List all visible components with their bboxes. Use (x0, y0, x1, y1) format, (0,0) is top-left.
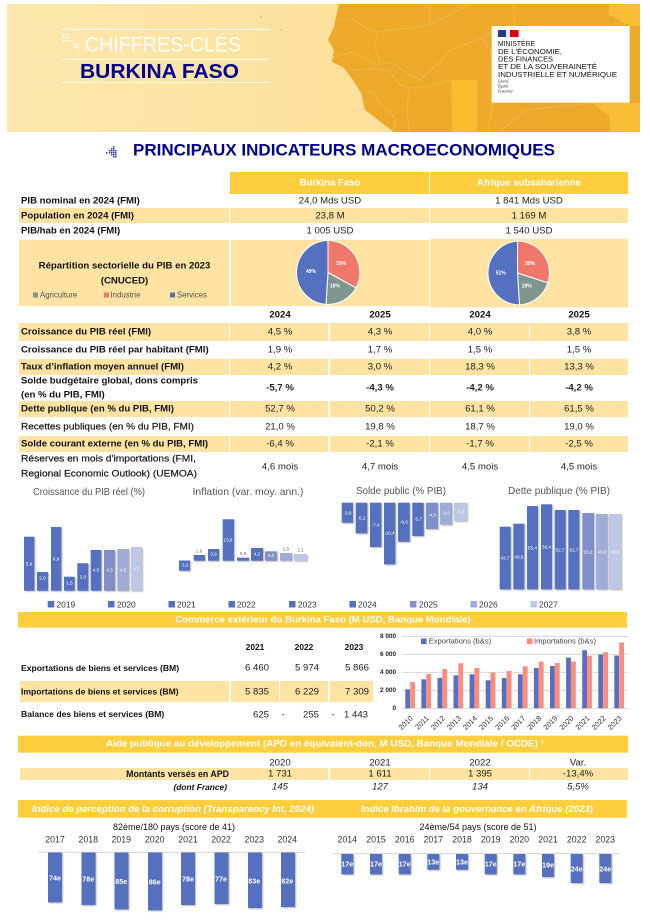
table: commerce: 5 974 (295, 662, 320, 674)
chart: dette publique: 46,6 (515, 554, 524, 560)
table: aide publique: 5,5% (567, 782, 589, 792)
table: commerce (20, 642, 373, 720)
chart: dette publique (500, 485, 621, 589)
row: PIB par habitant: PIB/hab en 2024 (FMI) (21, 226, 120, 236)
bars: importations (410, 642, 624, 708)
logo: ministry: DES FINANCES (498, 54, 553, 64)
panel: Ibrahim index: 2019 (481, 834, 501, 844)
axis: years: 2020 (557, 714, 575, 732)
panel: corruption index: 74e (49, 874, 61, 882)
heading: commerce extérieur: Commerce extérieur du Burkina Faso (M USD, Banque Mondiale) (175, 614, 471, 626)
row: réserves: 4,5 mois (462, 462, 498, 472)
row: croissance par habitant: 1,5 % (567, 344, 592, 356)
table: commerce: 625 (253, 710, 269, 720)
logo: ministry: INDUSTRIELLE ET NUMÉRIQUE (498, 70, 617, 79)
row: réserves (21, 454, 597, 480)
row: croissance par habitant (21, 344, 592, 356)
panel: Ibrahim index: 13e (456, 858, 468, 866)
chart: exports and imports: 6 000 (380, 651, 396, 658)
row: croissance par habitant: 1,5 % (468, 344, 493, 356)
chart: exports and imports (380, 633, 628, 732)
year headers (269, 310, 590, 320)
chart: exports and imports: 0 (392, 705, 396, 712)
chart: inflation: 2,5 (283, 546, 290, 552)
legend: years: 2022 (237, 600, 256, 610)
panel: Ibrahim index: 24e (599, 864, 611, 874)
chart: solde public: -7,4 (372, 522, 380, 528)
panel: corruption index: 2022 (211, 834, 231, 844)
panel: Ibrahim index: 24ème/54 pays (score de 51) (419, 822, 537, 832)
heading: corruption: Indice de perception de la corruption (Transparency Int, 2024) (32, 804, 314, 815)
row: recettes: 18,7 % (465, 422, 495, 432)
panel: corruption index: 78e (182, 874, 194, 884)
panel: macro table (19, 172, 628, 480)
table bands (19, 208, 628, 452)
panel: Ibrahim index: 17e (370, 860, 382, 868)
pie chart: Afrique subsaharienne (488, 241, 549, 305)
row: dette: 61,1 % (465, 404, 495, 414)
chart: dette publique: 43,7 (501, 556, 510, 560)
table: aide publique: 1 611 (368, 768, 392, 780)
row: réserves: 4,6 mois (262, 462, 298, 472)
chart: exports and imports: 4 000 (380, 669, 396, 676)
chart: dette publique: 49,6 (598, 550, 607, 554)
axis: years: 2017 (509, 714, 527, 732)
panel: corruption index: 82ème/180 pays (score de 41) (113, 822, 235, 832)
legend: years (48, 600, 558, 610)
panel: corruption index: 2023 (245, 834, 264, 844)
text: sector breakdown heading: (CNUCED) (101, 276, 148, 286)
row: dette: 61,5 % (564, 404, 594, 414)
table: commerce: Importations de biens et services (BM) (21, 686, 179, 696)
icon: french flag (498, 30, 519, 37)
heading: corruption (18, 800, 328, 818)
chart: inflation: 3,0 (268, 553, 275, 558)
panel: Ibrahim index: 17e (513, 860, 525, 868)
table: aide publique: Montants versés en APD (126, 769, 229, 779)
year headers: 2024 (469, 310, 491, 320)
legend: years: 2025 (419, 600, 438, 610)
year headers: 2024 (269, 310, 291, 320)
pie chart: Burkina Faso: 33% (336, 261, 347, 267)
heading: country: BURKINA FASO (80, 61, 239, 83)
panel: Ibrahim index: 24e (571, 864, 583, 874)
panel: Ibrahim index: 17e (399, 860, 411, 868)
panel: corruption index: 2021 (178, 834, 198, 844)
icon: pixel pattern (62, 34, 79, 51)
row: population: Population en 2024 (FMI) (21, 210, 134, 222)
row: réserves: 4,7 mois (362, 462, 398, 472)
legend: years: 2023 (298, 600, 317, 610)
axis: years: 2010 (397, 714, 415, 732)
chart: solde public: -5,2 (358, 516, 366, 520)
logo: ministry: ET DE LA SOUVERAINETÉ (498, 62, 597, 71)
logo: ministry: DE L'ÉCONOMIE, (498, 47, 562, 56)
row: croissance: 4,0 % (468, 326, 493, 338)
chart: solde public (342, 485, 467, 564)
legend: trade: Exportations (b&s) (429, 636, 492, 646)
row: solde budgétaire: -5,7 % (266, 382, 294, 394)
row: dette: 52,7 % (265, 404, 295, 414)
table: aide publique: -13,4% (563, 768, 594, 780)
banner (7, 4, 640, 132)
row: population (21, 210, 546, 222)
main title: PRINCIPAUX INDICATEURS MACROECONOMIQUES (133, 142, 555, 160)
table: aide publique: 2021 (369, 758, 391, 768)
row: inflation: 4,2 % (268, 362, 293, 372)
pie chart: Burkina Faso: 18% (330, 284, 341, 290)
chart: inflation: 3,9 (210, 552, 217, 556)
panel: Ibrahim index: 2017 (424, 834, 443, 844)
axis: years: 2012 (429, 714, 447, 732)
axis: years (397, 714, 624, 732)
panel: Ibrahim index: 2018 (452, 834, 472, 844)
chart: croissance du PIB: 4,5 (120, 568, 127, 572)
chart: dette publique: 50,2 (584, 550, 593, 554)
panel: Ibrahim index: 17e (341, 860, 353, 868)
chart: solde public: Solde public (% PIB) (356, 485, 446, 497)
legend: years: 2026 (479, 600, 498, 610)
table: commerce: - (331, 710, 335, 720)
chart: croissance du PIB (24, 486, 145, 591)
chart: inflation: 13,8 (224, 538, 233, 542)
column headers: Burkina Faso (300, 178, 361, 188)
row: population: 23,8 M (315, 210, 345, 222)
legend: trade (421, 636, 597, 646)
chart: inflation: 1,9 (196, 548, 203, 554)
table: commerce: 5 866 (345, 662, 369, 674)
pie chart: Burkina Faso (296, 240, 360, 304)
panel: Ibrahim index: 2015 (366, 834, 386, 844)
bars: exportations (405, 650, 619, 708)
axis: years: 2018 (525, 714, 543, 732)
panel: Ibrahim index (328, 800, 627, 883)
table: commerce: 1 443 (344, 710, 368, 720)
chart: croissance du PIB: 2,0 (39, 576, 46, 580)
chart: inflation: 2,1 (297, 548, 304, 552)
table: aide publique: 2022 (469, 758, 491, 768)
panel: corruption index: 2017 (45, 834, 65, 844)
row: croissance par habitant: Croissance du PIB réel par habitant (FMI) (21, 344, 209, 356)
text: sector breakdown heading: Répartition sectorielle du PIB en 2023 (39, 260, 210, 272)
chart: dette publique: 49,9 (611, 550, 620, 554)
pie chart: Burkina Faso: 49% (306, 269, 317, 275)
table: aide publique: 2020 (269, 758, 291, 768)
row: PIB nominal: 1 841 Mds USD (495, 196, 563, 206)
legend: sectors: Agriculture (40, 290, 77, 300)
row: croissance par habitant: 1,7 % (368, 344, 393, 356)
panel: Ibrahim index: 19e (542, 860, 554, 870)
heading: aide publique: Aide publique au développement (APD en équivalent-don, M USD, Banque Mondiale / OCDE) ¹ (106, 738, 544, 750)
heading: chiffres-clés: CHIFFRES-CLÉS (85, 34, 241, 56)
chart: croissance du PIB: 4,7 (133, 566, 140, 572)
row: recettes: 19,0 % (564, 422, 594, 432)
row: solde budgétaire: -4,2 % (565, 382, 593, 394)
panel: Ibrahim index: 2023 (596, 834, 615, 844)
row: recettes: Recettes publiques (en % du PIB, FMI) (21, 422, 194, 432)
row: croissance: 3,8 % (567, 326, 592, 338)
row: dette: 50,2 % (365, 404, 395, 414)
row: recettes (21, 422, 594, 432)
logo: ministry: MINISTÈRE (498, 39, 535, 48)
chart: exports and imports: 8 000 (380, 633, 396, 640)
row: solde courant: Solde courant externe (en % du PIB, FMI) (21, 438, 208, 450)
heading: Ibrahim: Indice Ibrahim de la gouvernance en Afrique (2023) (361, 804, 593, 815)
row: solde courant: -6,4 % (266, 438, 294, 450)
chart: solde public: -4,3 (428, 512, 436, 518)
chart: croissance du PIB: 6,9 (53, 556, 60, 562)
icon: title pixels (106, 146, 116, 158)
row: solde courant: -2,1 % (366, 438, 394, 450)
chart: solde public: -3,8 (344, 510, 352, 516)
chart: exports and imports: 2 000 (380, 687, 396, 694)
row: croissance par habitant: 1,9 % (268, 344, 293, 356)
panel: Ibrahim index: 2016 (395, 834, 415, 844)
panel: Ibrahim index: 2022 (567, 834, 587, 844)
panel: Ibrahim index: 13e (427, 858, 439, 866)
legend: years: 2019 (56, 600, 75, 610)
row: inflation (21, 362, 594, 372)
panel: corruption index: 2018 (79, 834, 98, 844)
table: aide publique: Var. (570, 758, 586, 768)
axis: years: 2011 (413, 714, 431, 731)
legend: years: 2020 (117, 600, 136, 610)
logo: ministry (492, 26, 630, 103)
heading: Ibrahim (328, 800, 627, 818)
panel: corruption index: 83e (248, 876, 260, 886)
chart: inflation: Inflation (var. moy. ann.) (192, 486, 304, 498)
banner title rules (62, 29, 270, 82)
legend: years: 2027 (539, 600, 558, 610)
heading: commerce extérieur (18, 612, 627, 628)
row: PIB par habitant (21, 226, 553, 236)
legend: years: 2021 (177, 600, 196, 610)
table: commerce: Balance des biens et services (BM) (21, 709, 164, 719)
chart: dette publique: 55,4 (528, 546, 537, 550)
row: recettes: 19,8 % (365, 422, 395, 432)
axis: years: 2013 (445, 714, 463, 732)
year headers: 2025 (369, 310, 391, 320)
pie chart: Afrique subsaharienne: 51% (496, 271, 506, 277)
row: PIB par habitant: 1 540 USD (506, 226, 553, 236)
row: croissance: 4,5 % (268, 326, 293, 338)
axis: years: 2019 (541, 714, 559, 732)
row: population: 1 169 M (512, 210, 546, 222)
panel: corruption index: 2019 (112, 834, 131, 844)
table: aide publique (20, 758, 628, 792)
chart: dette publique: 52,7 (556, 548, 565, 552)
row: inflation: 18,3 % (465, 362, 495, 372)
chart: croissance du PIB: 3,0 (80, 574, 87, 580)
legend: trade: Importations (b&s) (534, 636, 597, 646)
axis: years: 2016 (493, 714, 511, 732)
row: réserves: 4,5 mois (561, 462, 597, 472)
table: commerce: 6 229 (295, 686, 319, 698)
row: inflation: 3,0 % (368, 362, 393, 372)
chart: inflation: -3,2 (181, 562, 189, 568)
row: croissance: Croissance du PIB réel (FMI) (21, 326, 151, 338)
heading: aide publique (18, 736, 628, 753)
table: aide publique: 127 (372, 782, 389, 792)
chart: croissance du PIB: 4,5 (93, 568, 100, 572)
axis: years: 2014 (461, 714, 479, 732)
row: PIB par habitant: 1 005 USD (307, 226, 354, 236)
panel: corruption index: 86e (149, 878, 161, 886)
table: commerce: 255 (303, 710, 319, 720)
logo: ministry: Égalité (497, 83, 509, 88)
row: solde budgétaire: (en % du PIB, FMI) (21, 390, 105, 400)
row: PIB nominal (21, 196, 563, 206)
row: réserves: Réserves en mois d'importations (FMI, (21, 454, 196, 464)
panel: Ibrahim index: 2014 (338, 834, 357, 844)
row: croissance: 4,3 % (368, 326, 393, 338)
table: aide publique: 1 395 (468, 768, 492, 780)
table: commerce: 6 460 (245, 662, 269, 674)
table: aide publique: 134 (472, 782, 488, 792)
table: commerce: - (281, 710, 285, 720)
chart: solde public: -5,7 (414, 516, 422, 522)
row: PIB nominal: 24,0 Mds USD (299, 196, 361, 206)
table: commerce: 7 309 (345, 686, 369, 698)
chart: croissance du PIB: 1,5 (66, 580, 73, 586)
table: commerce: 2022 (295, 642, 314, 652)
legend: sectors: Services (177, 290, 207, 300)
chart: solde public: -3,6 (442, 510, 450, 516)
axis: years: 2023 (606, 714, 624, 732)
axis: years: 2022 (590, 714, 608, 732)
chart: croissance du PIB: 5,9 (26, 562, 33, 566)
row: solde courant (21, 438, 593, 450)
table: commerce: Exportations de biens et services (BM) (21, 663, 179, 673)
chart: inflation (179, 486, 307, 571)
chart: croissance du PIB: 4,3 (106, 568, 113, 572)
chart: solde public: -10,4 (384, 530, 395, 536)
row: solde courant: -1,7 % (466, 438, 494, 450)
chart: dette publique: 56,4 (542, 544, 551, 550)
pie chart: Afrique subsaharienne: 30% (525, 261, 536, 267)
logo: ministry: Liberté (497, 80, 509, 84)
row: solde budgétaire (21, 376, 593, 400)
table: commerce: 2023 (345, 642, 364, 652)
axis: years: 2021 (574, 714, 592, 732)
legend: sectors (33, 290, 207, 300)
panel: corruption index: 77e (215, 874, 227, 884)
legend: sectors: Industrie (110, 290, 140, 300)
row: dette (21, 404, 594, 414)
table: aide publique: 1 731 (268, 768, 292, 780)
chart: croissance du PIB: Croissance du PIB réel (%) (33, 486, 145, 498)
chart: dette publique: Dette publique (% PIB) (508, 485, 610, 497)
row: inflation: 13,3 % (564, 362, 594, 372)
chart: solde public: -3,0 (457, 510, 465, 514)
axis: years: 2015 (477, 714, 495, 732)
map of West Africa (260, 4, 640, 132)
chart: inflation: 4,2 (254, 552, 261, 556)
panel: Ibrahim index: 2021 (538, 834, 558, 844)
column headers: Afrique subsaharienne (477, 178, 581, 188)
chart: dette publique: 52,7 (570, 548, 579, 552)
row: solde budgétaire: -4,2 % (466, 382, 494, 394)
text: sector breakdown heading (39, 260, 210, 286)
row: dette: Dette publique (en % du PIB, FMI) (21, 404, 174, 414)
column headers (230, 172, 628, 194)
row: PIB nominal: PIB nominal en 2024 (FMI) (21, 196, 140, 206)
row: solde budgétaire: Solde budgétaire global, dons compris (21, 376, 198, 386)
chart: solde public: -6,6 (400, 520, 408, 524)
row: inflation: Taux d’inflation moyen annuel (FMI) (21, 362, 184, 372)
pie chart: Afrique subsaharienne: 19% (522, 284, 532, 290)
panel: corruption index: 2020 (145, 834, 165, 844)
panel: corruption index: 2024 (278, 834, 297, 844)
panel: corruption index: 78e (82, 874, 94, 884)
legend: years: 2024 (358, 600, 377, 610)
panel: corruption index: 85e (115, 877, 127, 886)
row: solde courant: -2,5 % (565, 438, 593, 450)
year headers: 2025 (568, 310, 590, 320)
row: réserves: Regional Economic Outlook) (UEMOA) (21, 468, 197, 480)
panel: corruption index (18, 800, 328, 910)
panel: Ibrahim index: 17e (485, 860, 497, 868)
table: aide publique: (dont France) (173, 782, 227, 792)
panel: corruption index: 82e (281, 876, 293, 886)
table: aide publique: 145 (272, 782, 289, 792)
table: commerce: 5 835 (245, 686, 269, 698)
panel: Ibrahim index: 2020 (510, 834, 529, 844)
table: commerce: 2021 (246, 642, 265, 652)
row: croissance (21, 326, 592, 338)
chart: inflation: 0,9 (240, 551, 247, 556)
logo: ministry: Fraternité (497, 89, 513, 93)
row: solde budgétaire: -4,3 % (366, 382, 394, 394)
row: recettes: 21,0 % (265, 422, 295, 432)
